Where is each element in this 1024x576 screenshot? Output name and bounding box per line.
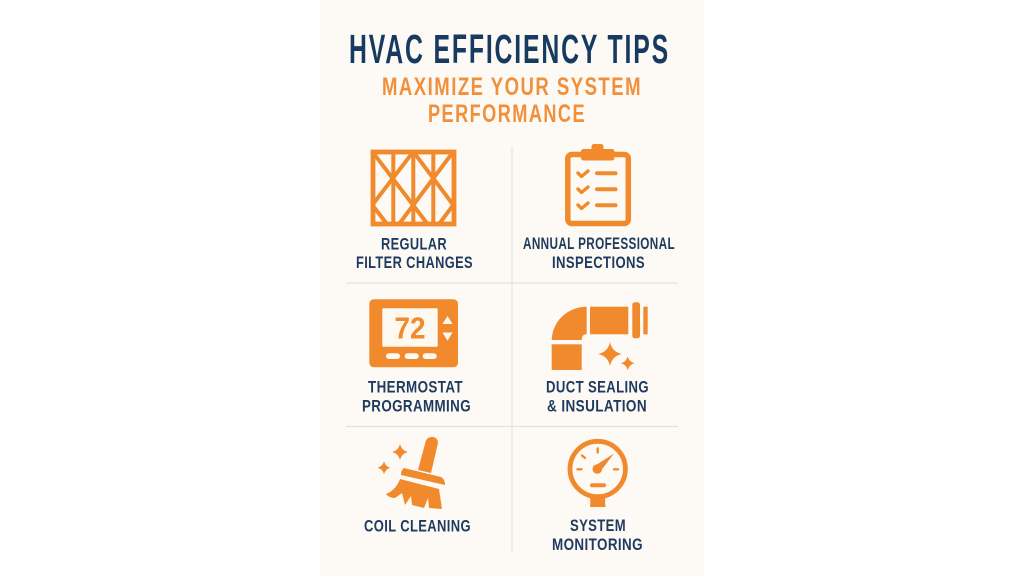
label: duct sealing and insulation bbox=[546, 378, 649, 416]
icon: clipboard checklist bbox=[568, 144, 628, 224]
panel: thermostat programming bbox=[362, 299, 471, 416]
label: system monitoring: MONITORING bbox=[552, 535, 643, 554]
icon: brush with sparkles bbox=[378, 437, 445, 509]
panel: coil cleaning bbox=[364, 437, 471, 536]
icon: air filter bbox=[372, 151, 454, 225]
label: thermostat programming: PROGRAMMING bbox=[362, 396, 471, 416]
label: annual professional inspections: ANNUAL PROFESSIONAL bbox=[523, 234, 675, 253]
panel: system monitoring bbox=[552, 441, 643, 554]
panel: regular filter changes bbox=[356, 151, 473, 272]
label: regular filter changes bbox=[356, 234, 473, 272]
label: thermostat programming: THERMOSTAT bbox=[368, 378, 463, 396]
title: HVAC EFFICIENCY TIPS bbox=[349, 26, 670, 72]
label: duct sealing and insulation: & INSULATION bbox=[547, 396, 647, 416]
label: annual professional inspections: INSPECTIONS bbox=[552, 253, 645, 272]
label: thermostat programming bbox=[362, 378, 471, 416]
subtitle bbox=[382, 73, 642, 128]
label: annual professional inspections bbox=[523, 234, 675, 272]
icon: pressure gauge bbox=[570, 441, 625, 507]
label: system monitoring bbox=[552, 516, 643, 554]
panel: annual professional inspections bbox=[523, 144, 675, 272]
panel: infographic background bbox=[320, 0, 704, 576]
label: coil cleaning: COIL CLEANING bbox=[364, 516, 471, 536]
icon: thermostat: 72 bbox=[394, 310, 426, 346]
subtitle: MAXIMIZE YOUR SYSTEM bbox=[382, 73, 642, 101]
subtitle: PERFORMANCE bbox=[428, 100, 586, 128]
panel: duct sealing and insulation bbox=[546, 302, 649, 416]
label: regular filter changes: FILTER CHANGES bbox=[356, 253, 473, 272]
label: duct sealing and insulation: DUCT SEALING bbox=[546, 378, 649, 396]
label: regular filter changes: REGULAR bbox=[381, 234, 447, 254]
icon: duct with sparkles bbox=[552, 302, 648, 370]
label: system monitoring: SYSTEM bbox=[570, 516, 626, 535]
